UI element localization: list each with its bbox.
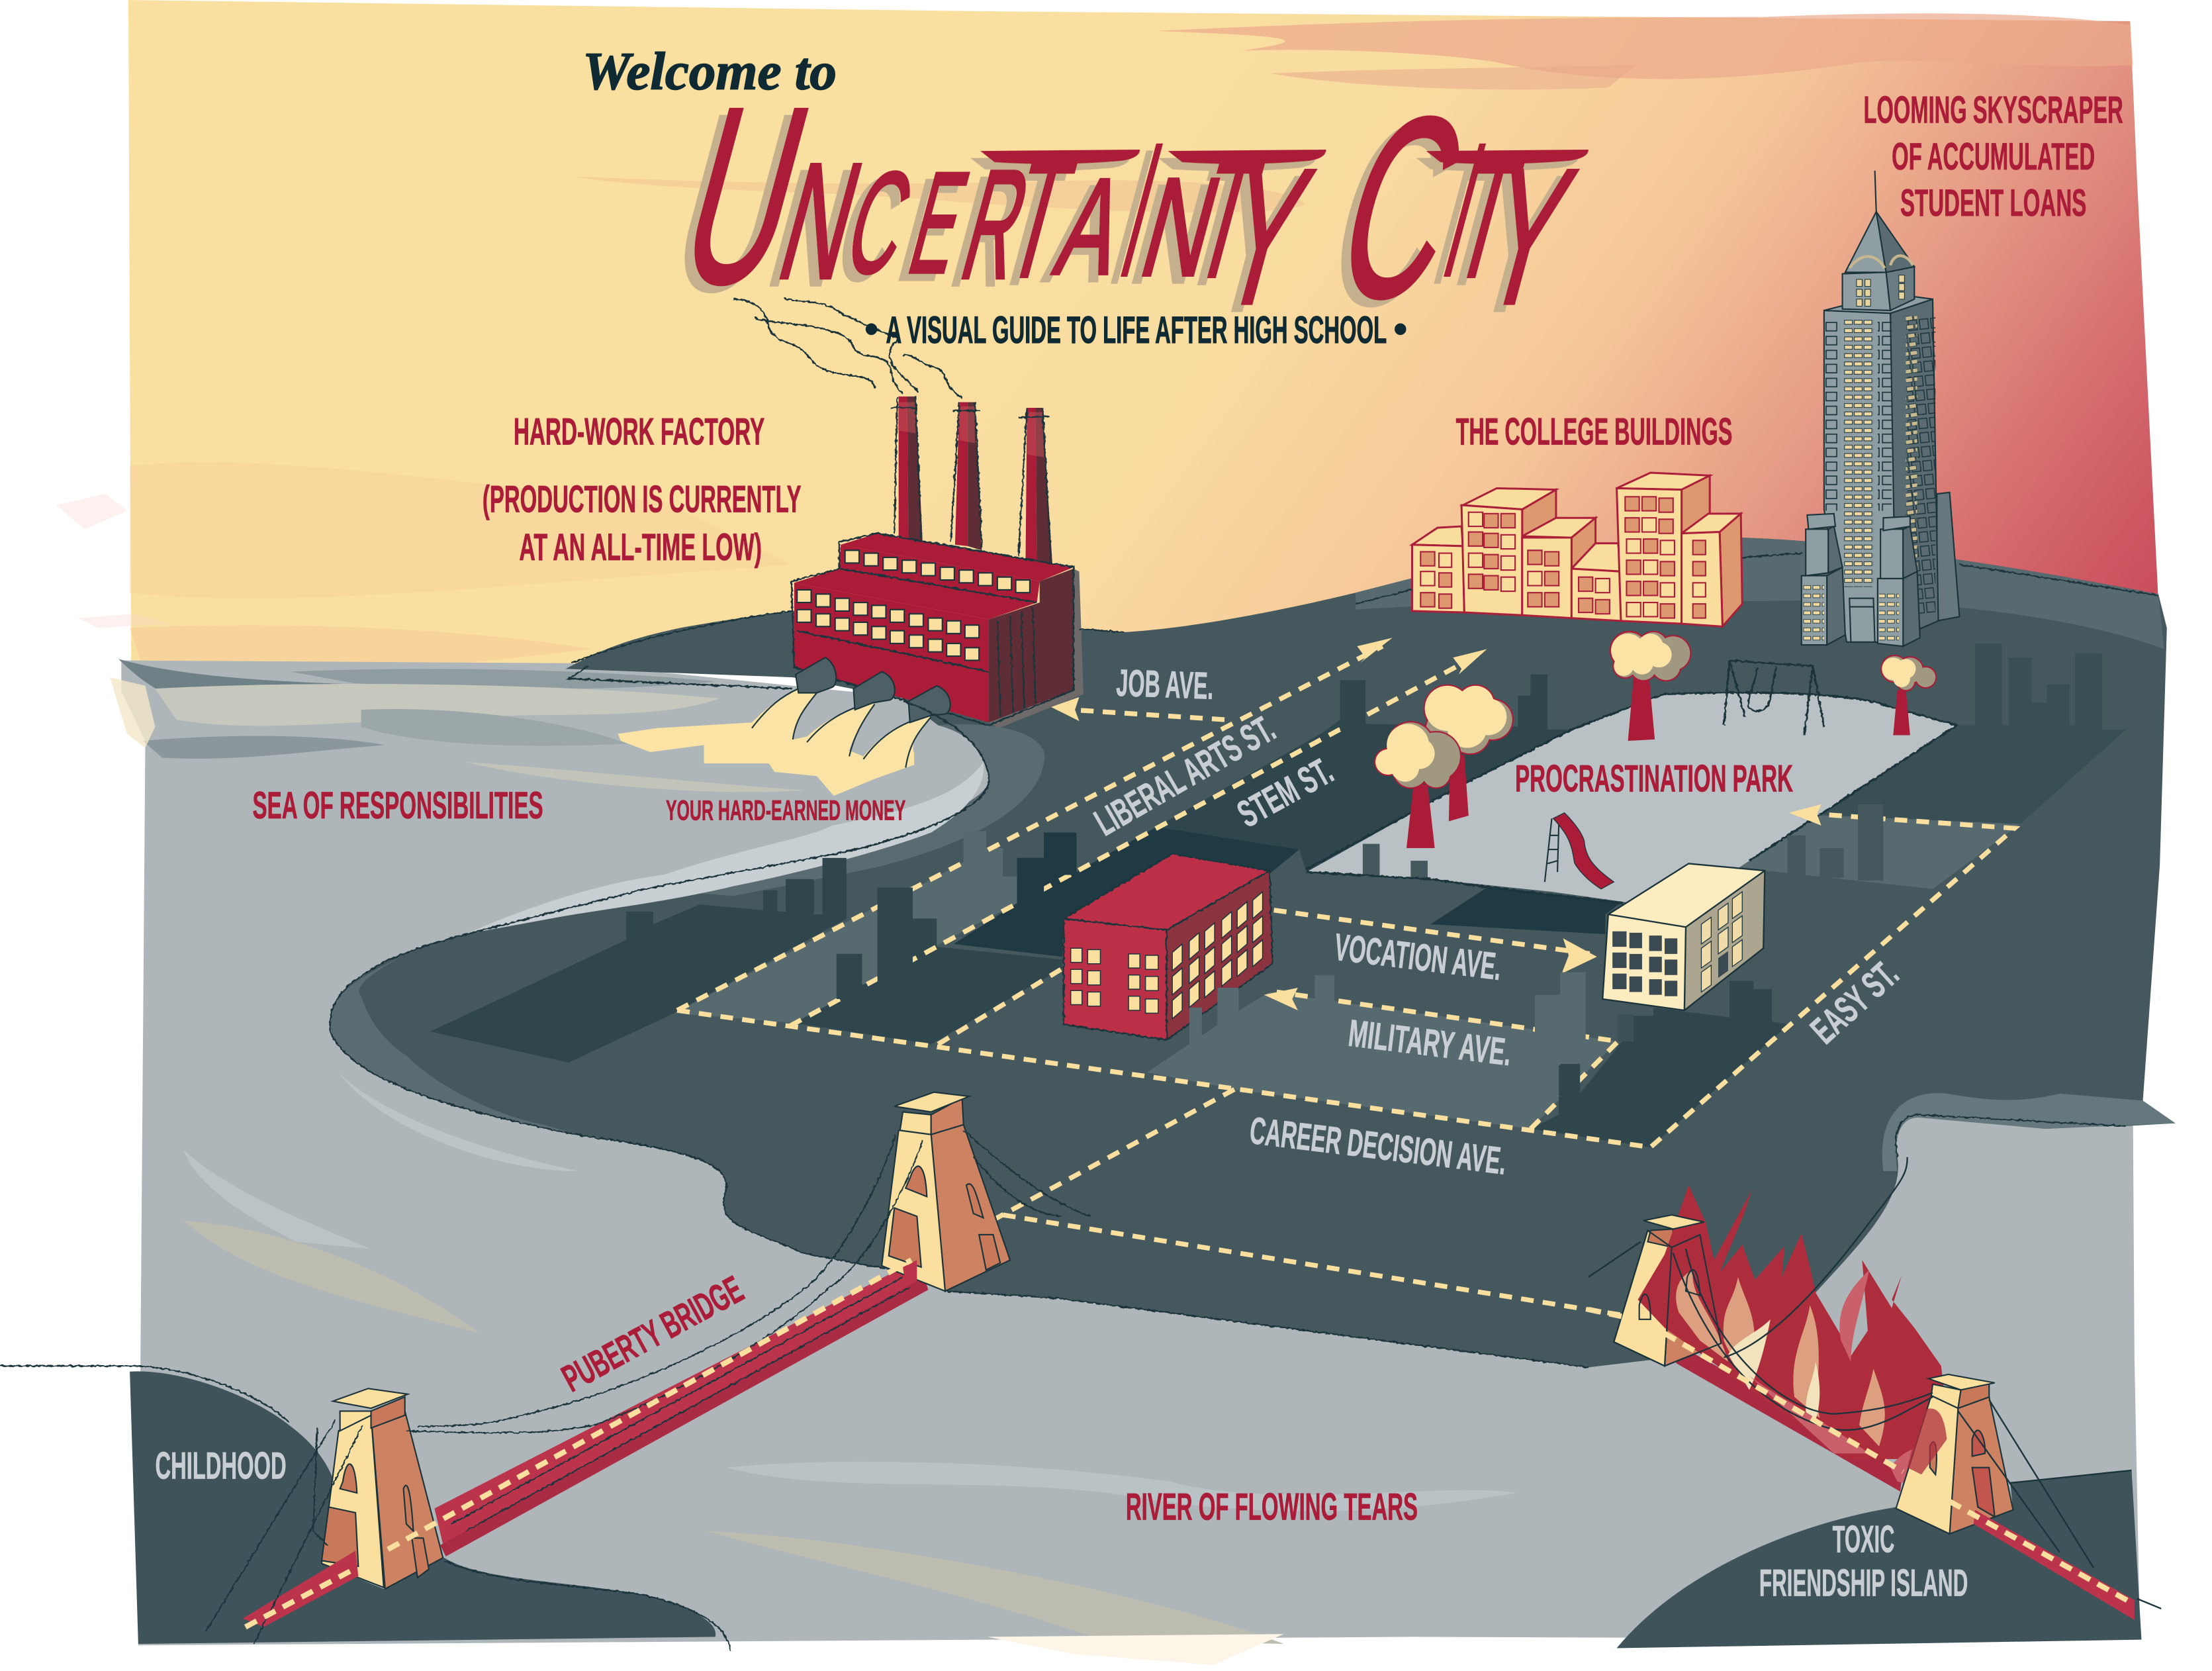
label: hard-work factory: HARD-WORK FACTORY [514, 410, 764, 453]
centre dashes [246, 1260, 911, 1627]
deck section beyond the near tower [434, 1260, 928, 1556]
label: sea of responsibilities: SEA OF RESPONSIBILITIES [253, 785, 543, 827]
street label: vocation ave: VOCATION AVE. [1332, 926, 1504, 988]
light crescent of the shore [330, 724, 1045, 1136]
street label: military ave: MILITARY AVE. [1346, 1012, 1514, 1074]
left annex [1827, 567, 1845, 645]
label: production note: AT AN ALL-TIME LOW) [519, 526, 762, 569]
hard-earned money flow [618, 689, 931, 796]
windows [1071, 892, 1263, 1019]
title: uncertainty city: C [833, 142, 927, 303]
dark patch before the park [1430, 888, 1622, 934]
title: uncertainty city: N [764, 128, 878, 313]
looming skyscraper [1802, 171, 1959, 646]
drain pipes [796, 657, 950, 722]
title: uncertainty city: R [948, 138, 1045, 311]
left tower cap and outline over the flames [1614, 1215, 1721, 1366]
college windows: lit [1420, 512, 1706, 616]
title: uncertainty city: C [1314, 64, 1490, 351]
label: looming skyscraper [1864, 89, 2123, 224]
crown windows [1857, 275, 1904, 307]
college windows: shaded [1420, 497, 1706, 618]
factory shore sketch line [569, 666, 989, 853]
title: uncertainty city: T [990, 122, 1089, 313]
deck end over the far tower [903, 1260, 917, 1287]
label: procrastination park: PROCRASTINATION PARK [1515, 758, 1793, 800]
label: childhood: CHILDHOOD [155, 1445, 287, 1488]
flame licking the right tower [1908, 1409, 1947, 1474]
light strip along the horizon [1356, 538, 2164, 649]
title: uncertainty city: T [1438, 122, 1537, 313]
deck section in front of the near tower [243, 1551, 358, 1627]
tree at the back [1424, 685, 1514, 821]
deck [1676, 1347, 1903, 1492]
factory walls [841, 534, 1074, 581]
street label: job ave: JOB AVE. [1115, 662, 1215, 708]
subtitle: • [1394, 308, 1407, 350]
centre dashes [1589, 1310, 2135, 1604]
city block shadows and skylines [430, 642, 2126, 1147]
subtitle [865, 308, 1407, 352]
far tower [882, 1092, 1010, 1291]
slide [1545, 813, 1614, 889]
shore brush highlight [465, 762, 984, 934]
deck beyond the right tower [1974, 1510, 2135, 1620]
cables [206, 1130, 1091, 1644]
title: uncertainty city: A [1043, 150, 1140, 303]
smokestacks [892, 397, 1052, 565]
windows [1612, 931, 1677, 996]
fire [1638, 1185, 1947, 1489]
street label: liberal arts st: LIBERAL ARTS ST. [1087, 707, 1282, 844]
cables [1589, 1157, 2161, 1609]
subtitle: • [865, 308, 878, 350]
title: uncertainty city: I [1428, 104, 1502, 316]
toxic friendship island [1617, 1470, 2141, 1648]
title: uncertainty city: N [1128, 149, 1234, 305]
main city land [330, 538, 2176, 1367]
sky background [128, 0, 2158, 677]
near tower [322, 1388, 443, 1589]
label: river of flowing tears: RIVER OF FLOWING TEARS [1126, 1486, 1418, 1529]
childhood land [130, 1371, 715, 1644]
label: puberty bridge: PUBERTY BRIDGE [555, 1268, 751, 1400]
label: production note [483, 479, 802, 569]
arrowheads [1051, 638, 1821, 1010]
title: uncertainty city: E [896, 142, 982, 303]
street label: career decision ave: CAREER DECISION AVE. [1248, 1110, 1509, 1183]
factory windows [797, 550, 1030, 660]
title: uncertainty city: Y [1201, 128, 1329, 344]
water: sea of responsibilities and river of flowing tears [121, 660, 2140, 1645]
title: welcome to: Welcome to [582, 41, 837, 101]
swing set [1724, 660, 1824, 735]
far wing [1937, 493, 1959, 621]
tree beside the swings [1880, 655, 1937, 735]
clouds [56, 13, 2133, 663]
right annex [1903, 571, 1920, 646]
label: hard-earned money: YOUR HARD-EARNED MONEY [666, 794, 905, 826]
skyline in front of park [1363, 844, 1428, 882]
crown [1843, 272, 1890, 310]
left tower [1614, 1222, 1721, 1366]
title: uncertainty city: U [659, 54, 833, 336]
smoke [733, 298, 962, 398]
title: uncertainty city: T [1178, 122, 1277, 313]
factory [733, 298, 1083, 728]
sea brush strokes [110, 659, 1516, 1665]
shore brush at the eastern bank [1882, 1093, 2176, 1171]
label: toxic friendship island: FRIENDSHIP ISLAND [1759, 1562, 1968, 1605]
burning bridge [1589, 1157, 2161, 1620]
tree in the park [1610, 631, 1692, 741]
label: toxic friendship island: TOXIC [1833, 1519, 1894, 1561]
title: uncertainty city: I [1105, 104, 1179, 316]
red building: vocational school [1064, 853, 1273, 1040]
skyline blocks standing over the roads [837, 680, 1883, 1129]
right tower [1896, 1374, 2013, 1534]
title: uncertainty city: Y [1463, 128, 1592, 344]
label: college buildings: THE COLLEGE BUILDINGS [1456, 410, 1732, 453]
street label: stem st: STEM ST. [1230, 749, 1340, 836]
road dashes [677, 646, 2015, 1315]
coast sketch lines [0, 553, 2158, 1651]
college buildings [1412, 473, 1742, 626]
subtitle: A VISUAL GUIDE TO LIFE AFTER HIGH SCHOOL [886, 309, 1387, 352]
puberty bridge [206, 1092, 1091, 1644]
tree at the front [1374, 721, 1461, 848]
label: production note: (PRODUCTION IS CURRENTLY [483, 479, 802, 521]
label: toxic friendship island [1759, 1519, 1968, 1605]
street label: easy st: EASY ST. [1803, 953, 1907, 1052]
title: uncertainty city [659, 54, 1592, 351]
procrastination park lawn [1307, 692, 1957, 910]
tower front [1824, 310, 1896, 642]
cream building: trade school [1602, 863, 1765, 1010]
tower side [1890, 299, 1939, 630]
